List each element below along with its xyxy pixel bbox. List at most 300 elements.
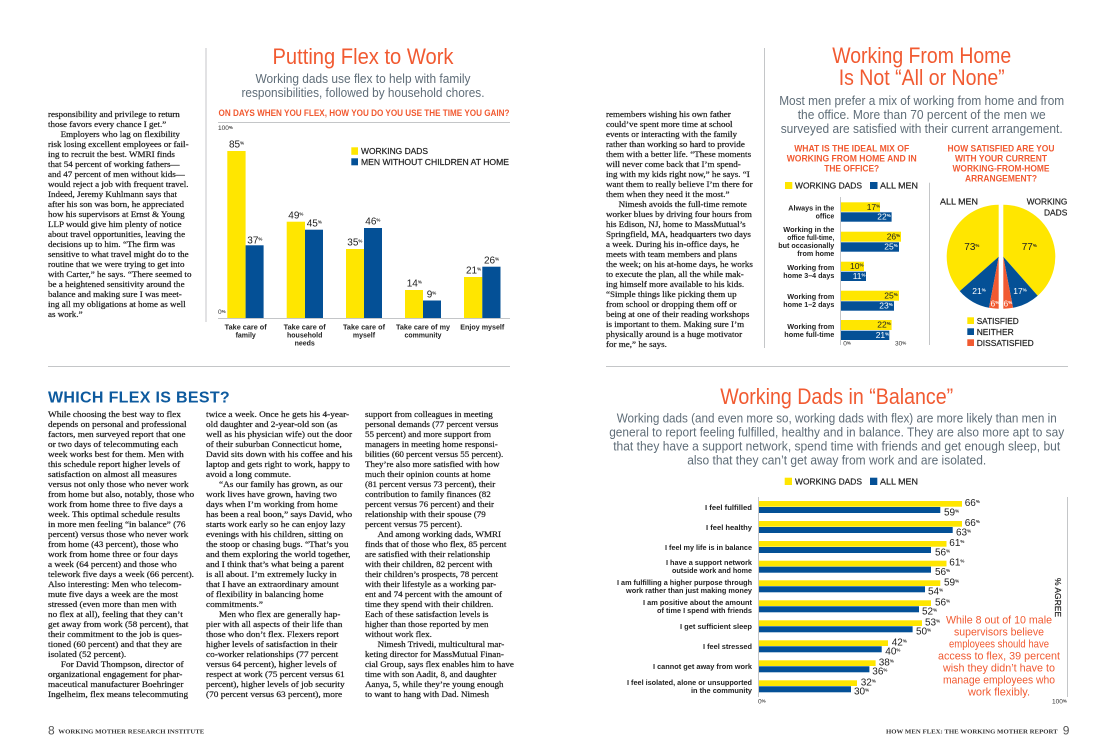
pie chart: all men: 6 xyxy=(990,298,995,308)
bar chart: percent agree: work rather than just making money xyxy=(625,588,752,595)
bar chart: use of flex time: % xyxy=(258,236,262,241)
bar chart: percent agree: % xyxy=(762,698,766,704)
bar chart: use of flex time: % xyxy=(432,290,436,295)
callout: male supervisors: work flexibly. xyxy=(967,687,1030,699)
bar chart: percent agree: I feel stressed xyxy=(703,644,752,651)
bar chart: percent agree: 66 xyxy=(965,498,976,509)
bar chart: percent agree: 52 xyxy=(922,607,933,618)
bar chart: ideal mix: from home xyxy=(797,251,834,258)
bar chart: percent agree: % xyxy=(896,648,900,653)
bar chart: percent agree: outside work and home xyxy=(672,568,752,575)
text block: which flex column 3: their children’s prospects, 78 percent xyxy=(365,568,498,578)
text block: which flex column 3: They’re also more satisfied with how xyxy=(365,458,500,468)
pie chart: working dads: % xyxy=(1023,288,1027,292)
bar chart: percent agree: % xyxy=(939,588,943,593)
bar chart: percent agree: % xyxy=(872,678,876,683)
text block: which flex column 1: week. This optimal schedule results xyxy=(48,508,180,518)
bar chart: ideal mix: % xyxy=(889,302,893,307)
subtitle: balance summary: general to report feeling fulfilled, healthy and in balance. They are also more apt to say xyxy=(609,425,1065,440)
text block: which flex column 1: depends on personal and professional xyxy=(48,418,187,428)
bar chart: use of flex time: % xyxy=(222,309,226,314)
text block: which flex column 2: “As our family has grown, as our xyxy=(219,478,342,488)
text block: which flex column 3: 55 percent) and more support from xyxy=(365,428,491,438)
bar chart: percent agree: % xyxy=(960,539,964,544)
question: ideal mix: WORKING FROM HOME AND IN xyxy=(787,154,917,165)
bar chart: percent agree: 63 xyxy=(956,527,967,538)
bar chart: ideal mix: % xyxy=(887,321,891,326)
legend: satisfaction: DISSATISFIED xyxy=(977,338,1034,348)
bar chart: percent agree: I cannot get away from work xyxy=(653,664,752,671)
bar chart: ideal mix: 30 xyxy=(895,340,902,348)
text block: top right column: events or interacting with the family xyxy=(606,128,737,138)
text block: which flex column 3: with their lifestyle as a working par- xyxy=(365,578,496,588)
callout: male supervisors: access to flex, 39 percent xyxy=(938,651,1060,663)
text block: top right column: rather than working so hard to provide xyxy=(606,138,745,148)
bar chart: use of flex time: Take care of xyxy=(343,324,386,332)
text block: top left column xyxy=(48,109,192,319)
text block: which flex column 2: respect at work (75 percent versus 61 xyxy=(206,668,345,678)
text block: top left column: balance and making sure I was meet- xyxy=(48,289,182,299)
question: satisfaction: WITH YOUR CURRENT xyxy=(955,154,1047,165)
subtitle: balance summary: Working dads (and even more so, working dads with flex) are more likely than men in xyxy=(617,411,1057,426)
text block: which flex column 2: work lives have grown, having two xyxy=(206,488,337,498)
bar chart: use of flex time: family xyxy=(236,333,256,340)
bar chart: percent agree: I am positive about the amount xyxy=(643,600,753,607)
text block: top left column: as work.” xyxy=(48,309,83,319)
question: ideal mix: THE OFFICE? xyxy=(824,164,879,175)
bar chart: percent agree: 38 xyxy=(879,657,890,668)
text block: which flex column 3: with their children, 82 percent with xyxy=(365,558,492,568)
text block: which flex column 2: of their suburban Connecticut home, xyxy=(206,438,342,448)
bar chart: ideal mix: % xyxy=(902,340,906,346)
bar chart: ideal mix: 22 xyxy=(877,320,887,330)
pie chart: all men: % xyxy=(975,243,979,248)
text block: which flex column 1: work from home three or four days xyxy=(48,548,178,558)
bar chart: percent agree: % AGREE xyxy=(1053,578,1063,617)
text block: top right column: ing with my kids right now,” he says. “I xyxy=(606,168,750,178)
legend: ideal mix: WORKING DADS xyxy=(795,181,862,191)
text block: top right column: his Edison, NJ, home to MassMutual’s xyxy=(606,218,746,228)
callout: male supervisors: manage employees who xyxy=(943,675,1055,687)
panel: putting flex to work xyxy=(218,44,510,348)
text block: which flex column 3: support from colleagues in meeting xyxy=(365,408,493,418)
bar chart: percent agree: 53 xyxy=(925,617,936,628)
bar chart: percent agree: % xyxy=(960,559,964,564)
text block: which flex column 3: Each of these satisfaction levels is xyxy=(365,608,489,618)
text block: which flex column 1: While choosing the best way to flex xyxy=(48,408,181,418)
text block: which flex column 3: And among working dads, WMRI xyxy=(378,528,501,538)
bar chart: ideal mix: % xyxy=(847,340,851,346)
bar chart: use of flex time: % xyxy=(240,141,244,146)
panel: working dads in balance xyxy=(609,384,1068,706)
bar chart: percent agree: I feel fulfilled xyxy=(705,505,752,512)
bar chart: use of flex time: 100 xyxy=(218,125,229,132)
bar chart: percent agree: % xyxy=(955,578,959,583)
footer: left page: 8 xyxy=(48,724,55,738)
bar chart: use of flex time: 21 xyxy=(466,265,477,276)
text block: which flex column 2: avoid a long commute. xyxy=(206,468,291,478)
bar chart: ideal mix: Working in the xyxy=(783,227,834,234)
text block: top right column: physically around is a huge motivator xyxy=(606,328,742,338)
bar chart: use of flex time: Take care of xyxy=(284,324,326,332)
text block: top left column: decisions up to him. “The firm was xyxy=(48,239,175,249)
bar chart: ideal mix: % xyxy=(894,243,898,248)
text block: top right column: will never come back that I’m spend- xyxy=(606,158,741,168)
chart question: ON DAYS WHEN YOU FLEX, HOW YOU DO YOU USE THE TIME YOU GAIN? xyxy=(218,108,510,119)
text block: which flex column 3: time with son Aadit, 8, and daughter xyxy=(365,668,496,678)
question: ideal mix xyxy=(787,144,917,175)
question: satisfaction: WORKING-FROM-HOME xyxy=(952,164,1050,175)
text block: which flex column 3: to want to hang with Dad. Nimesh xyxy=(365,688,489,698)
text block: which flex column 2: the stoop or chasing bugs. “That’s you xyxy=(206,538,349,548)
pie chart: working dads xyxy=(1003,197,1068,309)
text block: top right column xyxy=(606,108,753,350)
bar chart: use of flex time: % xyxy=(477,266,481,271)
bar chart: ideal mix: % xyxy=(887,213,891,218)
text block: which flex column 3: keting director for MassMutual Finan- xyxy=(365,648,504,658)
text block: top left column: risk losing excellent employees or fail- xyxy=(48,139,189,149)
bar chart: percent agree: 36 xyxy=(872,667,883,678)
text block: which flex column 3: percent versus 76 percent) and their xyxy=(365,498,494,508)
text block: which flex column 1: Ingelheim, flex means telecommuting xyxy=(48,688,188,698)
bar chart: use of flex time: 14 xyxy=(407,279,418,290)
bar chart: percent agree: % xyxy=(955,508,959,513)
bar chart: percent agree: 59 xyxy=(944,577,955,588)
bar chart: percent agree: % xyxy=(946,548,950,553)
subtitle: flex use: Working dads use flex to help with family xyxy=(256,71,471,86)
legend: satisfaction: NEITHER xyxy=(977,327,1014,337)
bar chart: percent agree: % xyxy=(865,688,869,693)
text block: which flex column 1: isolated (52 percent). xyxy=(48,648,126,658)
text block: which flex column 1: telework five days a week (66 percent). xyxy=(48,568,194,578)
bar chart: percent agree: 50 xyxy=(916,627,927,638)
text block: top right column: Springfield, MA, headquarters two days xyxy=(606,228,751,238)
pie chart: all men xyxy=(940,197,999,309)
bar chart: percent agree: % xyxy=(967,528,971,533)
text block: top right column: Nimesh avoids the full-time remote xyxy=(619,198,747,208)
heading: working from home xyxy=(832,43,1011,90)
footer: left page: WORKING MOTHER RESEARCH INSTITUTE xyxy=(58,729,204,735)
text block: which flex column 3: finds that of those who flex, 85 percent xyxy=(365,538,506,548)
bar chart: use of flex time: 0 xyxy=(218,309,222,316)
text block: which flex column 2: is all about. I’m extremely lucky in xyxy=(206,568,337,578)
text block: which flex column 2: (70 percent versus 63 percent), more xyxy=(206,688,342,698)
heading: putting flex to work: Putting Flex to Work xyxy=(272,44,454,69)
bar chart: ideal mix: % xyxy=(894,292,898,297)
text block: which flex column 1: no flex at all), feeling that they can’t xyxy=(48,608,183,618)
text block: which flex column 3: managers in meeting home responsi- xyxy=(365,438,498,448)
text block: which flex column 1: get away from work (58 percent), that xyxy=(48,618,188,628)
text block: top right column: the week; on his at-home days, he works xyxy=(606,258,753,268)
subtitle: mix of home and office: Most men prefer a mix of working from home and from xyxy=(779,93,1064,108)
text block: which flex column 1: or two days of telecommuting each xyxy=(48,438,178,448)
bar chart: use of flex time: % xyxy=(299,211,303,216)
bar chart: percent agree: % xyxy=(933,608,937,613)
text block: which flex column 2: David sits down with his coffee and his xyxy=(206,448,353,458)
pie chart: all men: ALL MEN xyxy=(940,197,978,207)
bar chart: use of flex time: needs xyxy=(295,341,315,348)
legend: balance chart xyxy=(785,477,918,487)
text block: top right column: worker blues by driving four hours from xyxy=(606,208,752,218)
pie chart: working dads: 77 xyxy=(1022,242,1033,253)
bar chart: use of flex time: 46 xyxy=(365,216,376,227)
text block: top left column: sensitive to what travel might do to the xyxy=(48,249,189,259)
text block: which flex column 3: are satisfied with their relationship xyxy=(365,548,490,558)
text block: top right column: could’ve spent more time at school xyxy=(606,118,733,128)
text block: top left column: those favors every chance I get.” xyxy=(48,119,166,129)
bar chart: use of flex time: % xyxy=(318,220,322,225)
text block: which flex column 3: contribution to family finances (82 xyxy=(365,488,491,498)
text block: which flex column 2: evenings with his children, sitting on xyxy=(206,528,343,538)
text block: which flex column 2: old daughter and 2-year-old son (as xyxy=(206,418,338,428)
bar chart: percent agree: I feel healthy xyxy=(706,525,752,532)
legend: satisfaction xyxy=(967,316,1034,348)
legend: flex time chart: WORKING DADS xyxy=(361,146,428,156)
bar chart: percent agree: 56 xyxy=(935,547,946,558)
text block: top left column: Indeed, Jeremy Kuhlmann says that xyxy=(48,189,177,199)
callout: male supervisors: supervisors believe xyxy=(954,627,1044,639)
bar chart: ideal mix: % xyxy=(885,332,889,336)
text block: which flex column 2: commitments.” xyxy=(206,598,263,608)
bar chart: use of flex time: myself xyxy=(353,333,376,340)
text block: top right column: want them to really believe I’m there for xyxy=(606,178,753,188)
text block: top left column: routine that we were trying to get into xyxy=(48,259,185,269)
text block: which flex column 1: in more men feeling “in balance” (76 xyxy=(48,518,185,528)
text block: which flex column 3: time they spend with their children. xyxy=(365,598,493,608)
text block: which flex column 1: a week (64 percent) and those who xyxy=(48,558,177,568)
legend: balance chart: WORKING DADS xyxy=(795,477,862,487)
question: ideal mix: WHAT IS THE IDEAL MIX OF xyxy=(794,144,909,155)
bar chart: use of flex time: % xyxy=(495,256,499,261)
bar chart: ideal mix: 0 xyxy=(843,340,847,348)
text block: which flex column 2: laptop and gets right to work, happy to xyxy=(206,458,350,468)
bar chart: use of flex time: 45 xyxy=(307,219,318,230)
pie chart: all men: % xyxy=(995,300,999,305)
text block: which flex column 1 xyxy=(48,408,194,700)
text block: which flex column 2: twice a week. Once he gets his 4-year- xyxy=(206,408,349,418)
bar chart: ideal mix: 23 xyxy=(879,300,889,310)
bar chart: percent agree: % xyxy=(936,618,940,623)
subtitle: flex use xyxy=(242,71,484,100)
bar chart: use of flex time: Take care of xyxy=(225,324,267,332)
panel: working from home xyxy=(778,43,1068,348)
subtitle: balance summary: that they have a support network, spend time with friends and get enough sleep, but xyxy=(613,439,1061,454)
subtitle: mix of home and office: surveyed are satisfied with their current arrangement. xyxy=(781,121,1063,136)
text block: top right column: a week. During his in-office days, he xyxy=(606,238,739,248)
legend: satisfaction: SATISFIED xyxy=(977,316,1019,326)
bar chart: ideal mix: % xyxy=(896,233,900,238)
text block: top left column: would reject a job with frequent travel. xyxy=(48,179,189,189)
bar chart: percent agree: I feel my life is in balance xyxy=(665,545,752,552)
bar chart: ideal mix: Working from xyxy=(787,265,834,272)
bar chart: percent agree xyxy=(617,497,1068,706)
text block: which flex column 3 xyxy=(364,408,514,700)
text block: top left column: that 54 percent of working fathers— xyxy=(48,159,180,169)
text block: top left column: be a heightened sensitivity around the xyxy=(48,279,185,289)
bar chart: ideal mix: % xyxy=(876,204,880,208)
bar chart: percent agree: 54 xyxy=(928,587,939,598)
bar chart: percent agree: % xyxy=(976,519,980,524)
footer: left page xyxy=(48,724,204,738)
pie chart: all men: 73 xyxy=(964,242,975,253)
bar chart: percent agree: 42 xyxy=(892,637,903,648)
text block: which flex column 1: their commitment to the job is ques- xyxy=(48,628,182,638)
bar chart: use of flex time: Take care of my xyxy=(396,324,450,332)
bar chart: use of flex time: community xyxy=(404,333,442,340)
text block: which flex column 3: without work flex. xyxy=(365,628,432,638)
text block: which flex column 1: this schedule report higher levels of xyxy=(48,458,180,468)
bar chart: ideal mix: 25 xyxy=(884,290,894,300)
text block: which flex column 1: week works best for them. Men with xyxy=(48,448,184,458)
bar chart: percent agree: % xyxy=(946,568,950,573)
text block: which flex column 2: and them exploring the world together, xyxy=(206,548,350,558)
bar chart: percent agree: 61 xyxy=(949,558,960,569)
bar chart: percent agree: % xyxy=(946,598,950,603)
text block: which flex column 2: has been a real boon,” says David, who xyxy=(206,508,352,518)
text block: which flex column 2: pier with all aspects of their life than xyxy=(206,618,342,628)
text block: which flex column 1: stressed (even more than men with xyxy=(48,598,177,608)
bar chart: ideal mix: % xyxy=(862,272,866,278)
legend: flex time chart xyxy=(351,146,509,167)
bar chart: ideal mix: 25 xyxy=(884,242,894,252)
text block: which flex column 3: Aanya, 5, while they’re young enough xyxy=(365,678,504,688)
text block: which flex column 1: from home (43 percent), those who xyxy=(48,538,178,548)
text block: top left column: ing all my obligations at home as well xyxy=(48,299,186,309)
text block: top left column: how his supervisors at Ernst & Young xyxy=(48,209,185,219)
callout: male supervisors: employees should have xyxy=(949,639,1049,651)
question: satisfaction: HOW SATISFIED ARE YOU xyxy=(948,144,1055,155)
bar chart: ideal mix: 21 xyxy=(876,330,885,340)
bar chart: use of flex time: 35 xyxy=(347,238,358,249)
text block: which flex column 2: versus 64 percent), higher levels of xyxy=(206,658,336,668)
text block: which flex column 3: bilities (60 percent versus 55 percent). xyxy=(365,448,503,458)
bar chart: percent agree: 100 xyxy=(1052,698,1063,706)
text block: which flex column 2: that I have an extraordinary amount xyxy=(206,578,339,588)
bar chart: percent agree: in the community xyxy=(691,688,752,695)
text block: top right column: meets with team members and plans xyxy=(606,248,737,258)
legend: flex time chart: MEN WITHOUT CHILDREN AT HOME xyxy=(361,157,509,167)
bar chart: percent agree: % xyxy=(927,628,931,633)
text block: which flex column 2: well as his physician wife) out the door xyxy=(206,428,352,438)
text block: which flex column 1: work from home three to five days a xyxy=(48,498,183,508)
bar chart: use of flex time: 26 xyxy=(484,255,495,266)
text block: which flex column 2: Men who flex are generally hap- xyxy=(219,608,340,618)
text block: top right column: from school or dropping them off or xyxy=(606,298,737,308)
text block: top left column: Employers who lag on flexibility xyxy=(61,129,180,139)
bar chart: ideal mix: home 1–2 days xyxy=(783,302,834,309)
pie chart: working dads: DADS xyxy=(1044,207,1068,217)
text block: top left column: and 47 percent of men without kids— xyxy=(48,169,185,179)
heading: working from home: Working From Home xyxy=(832,43,1011,68)
bar chart: percent agree: 59 xyxy=(944,507,955,518)
bar chart: percent agree: 66 xyxy=(965,518,976,529)
text block: which flex column 2: starts work early so he can enjoy lazy xyxy=(206,518,345,528)
text block: top right column: them when they need it the most.” xyxy=(606,188,730,198)
bar chart: ideal mix: office xyxy=(816,214,834,221)
text block: which flex column 3: personal demands (77 percent versus xyxy=(365,418,498,428)
text block: top right column: for me,” he says. xyxy=(606,338,667,348)
text block: which flex column 2: and I think that’s what being a parent xyxy=(206,558,344,568)
subtitle: balance summary xyxy=(609,411,1065,468)
text block: which flex column 2 xyxy=(206,408,353,700)
bar chart: use of flex time: % xyxy=(418,280,422,285)
text block: which flex column 1: For David Thompson, director of xyxy=(61,658,184,668)
text block: top left column: LLP would give him plenty of notice xyxy=(48,219,181,229)
bar chart: ideal mix: Working from xyxy=(787,324,834,331)
bar chart: ideal mix: home 3–4 days xyxy=(783,273,834,280)
text block: top right column: remembers wishing his own father xyxy=(606,108,731,118)
bar chart: use of flex time: 49 xyxy=(288,210,299,221)
bar chart: use of flex time: % xyxy=(358,239,362,244)
subtitle: mix of home and office xyxy=(779,93,1064,136)
bar chart: ideal mix: % xyxy=(859,262,863,268)
text block: top right column: being at one of their reading workshops xyxy=(606,308,749,318)
text block: top right column: them with a better life. “These moments xyxy=(606,148,751,158)
text block: top right column: is important to them. Making sure I’m xyxy=(606,318,744,328)
text block: which flex column 2: co-worker relationships (77 percent xyxy=(206,648,338,658)
bar chart: percent agree: 40 xyxy=(885,647,896,658)
bar chart: ideal mix xyxy=(778,197,906,348)
subtitle: balance summary: also that they can’t get away from work and are isolated. xyxy=(687,453,986,468)
bar chart: percent agree: 0 xyxy=(758,698,762,706)
text block: which flex column 2: higher levels of satisfaction in their xyxy=(206,638,337,648)
text block: top left column: after his son was born, he appreciated xyxy=(48,199,184,209)
text block: which flex column 2: percent), higher levels of job security xyxy=(206,678,345,688)
heading: working dads in balance: Working Dads in “Balance” xyxy=(720,384,953,409)
bar chart: ideal mix: but occasionally xyxy=(778,243,834,250)
text block: which flex column 1: Also interesting: Men who telecom- xyxy=(48,578,181,588)
heading: which flex is best: WHICH FLEX IS BEST? xyxy=(48,390,230,407)
pie chart: working dads: % xyxy=(1008,300,1012,305)
text block: which flex column 1: mute five days a week are the most xyxy=(48,588,178,598)
bar chart: use of flex time: % xyxy=(376,217,380,222)
text block: which flex column 1: factors, men surveyed report that one xyxy=(48,428,185,438)
text block: top left column: with Carter,” he says. “There seemed to xyxy=(48,269,191,279)
question: satisfaction xyxy=(948,144,1055,185)
text block: top right column: to execute the plan, all the while mak- xyxy=(606,268,744,278)
text block: which flex column 3: relationship with their spouse (79 xyxy=(365,508,486,518)
bar chart: percent agree: % xyxy=(976,499,980,504)
bar chart: percent agree: I have a support network xyxy=(666,560,752,567)
text block: which flex column 1: satisfaction on almost all measures xyxy=(48,468,177,478)
bar chart: use of flex time: 37 xyxy=(247,235,258,246)
bar chart: use of flex time: % xyxy=(229,125,233,130)
callout: male supervisors: wish they didn’t have to xyxy=(942,663,1055,675)
text block: which flex column 1: organizational engagement for phar- xyxy=(48,668,182,678)
callout: male supervisors: While 8 out of 10 male xyxy=(946,615,1052,627)
text block: which flex column 3: (81 percent versus 73 percent), their xyxy=(365,478,495,488)
legend: ideal mix: ALL MEN xyxy=(880,181,918,191)
bar chart: percent agree: 61 xyxy=(949,538,960,549)
bar chart: ideal mix: home full-time xyxy=(784,332,834,339)
bar chart: ideal mix: 22 xyxy=(877,212,887,222)
bar chart: ideal mix: Working from xyxy=(787,294,834,301)
bar chart: use of flex time: Enjoy myself xyxy=(460,324,505,332)
pie chart: working dads: 17 xyxy=(1013,286,1023,296)
pie chart: working dads: WORKING xyxy=(1027,197,1067,207)
bar chart: percent agree: I am fulfilling a higher purpose through xyxy=(617,580,752,587)
pie chart: working dads: % xyxy=(1033,243,1037,248)
text block: top left column: ing to recruit the best. WMRI finds xyxy=(48,149,175,159)
text block: top right column: “Simple things like picking them up xyxy=(606,288,737,298)
bar chart: percent agree: 30 xyxy=(854,687,865,698)
bar chart: percent agree: 32 xyxy=(861,677,872,688)
text block: which flex column 3: higher than those reported by men xyxy=(365,618,489,628)
text block: top left column: about travel opportunities, leaving the xyxy=(48,229,185,239)
footer: right page xyxy=(886,724,1070,738)
text block: which flex column 1: maceutical manufacturer Boehringer xyxy=(48,678,183,688)
bar chart: ideal mix: 11 xyxy=(853,271,862,281)
